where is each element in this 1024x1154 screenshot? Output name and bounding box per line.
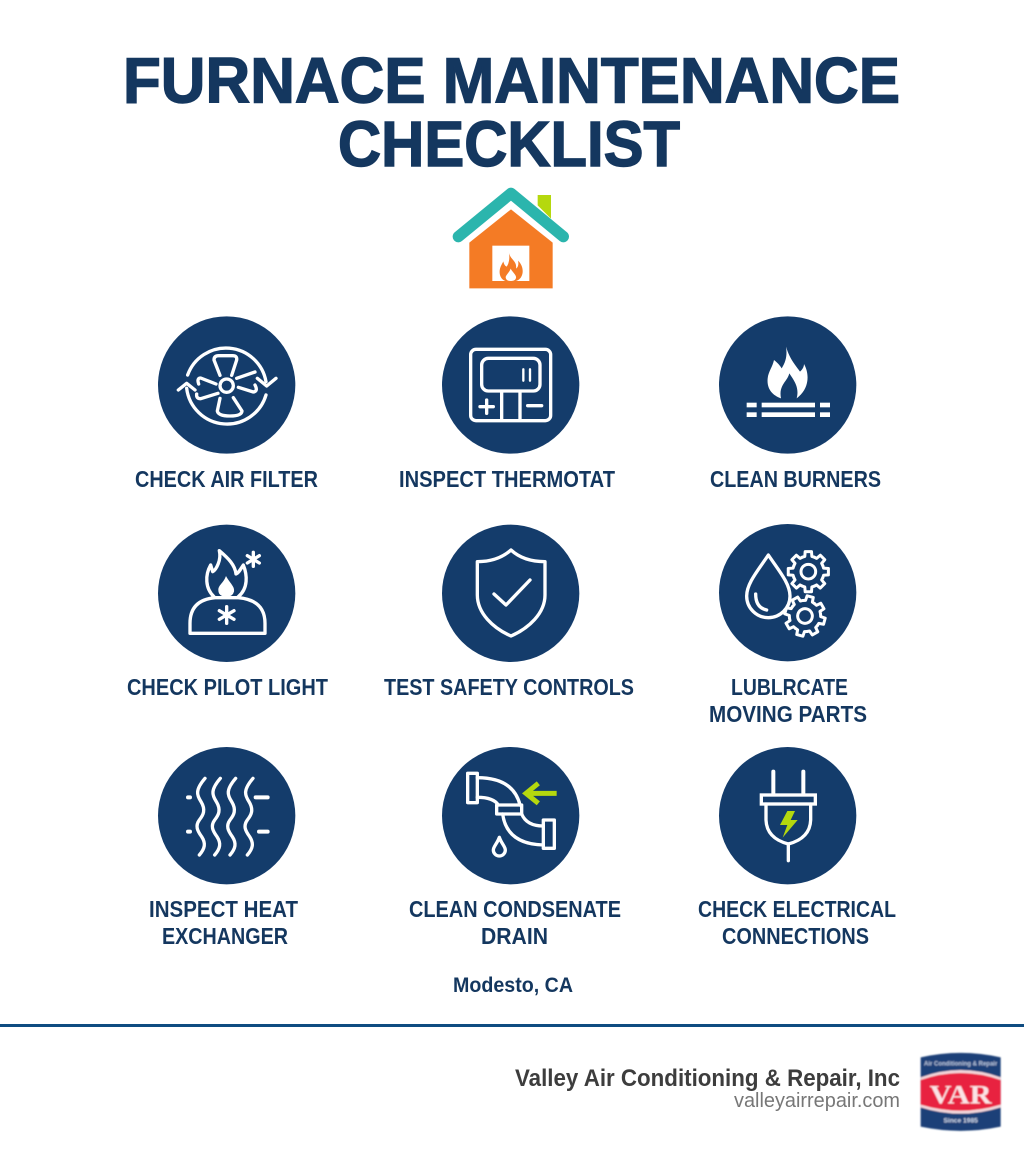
icon: oil drop and gears — [719, 524, 856, 661]
logo: VAR badge: Air Conditioning & Repair — [924, 1060, 998, 1067]
label: DRAIN — [481, 923, 548, 949]
panel: test safety controls — [384, 525, 634, 700]
label: EXCHANGER — [162, 923, 288, 949]
panel: clean burners — [710, 316, 881, 492]
icon: electrical plug — [719, 747, 856, 884]
panel: check air filter — [135, 316, 318, 492]
panel: check electrical connections — [698, 747, 896, 949]
panel: check pilot light — [127, 525, 328, 700]
label — [149, 896, 298, 949]
icon: pilot flame — [158, 525, 295, 662]
panel: lubricate moving parts — [709, 524, 867, 727]
logo: VAR badge: VAR — [930, 1080, 992, 1109]
icon: shield with check — [442, 525, 579, 662]
footer: website: valleyairrepair.com — [734, 1090, 900, 1112]
label: CHECK AIR FILTER — [135, 466, 318, 492]
logo: VAR badge — [921, 1053, 1001, 1131]
footer divider — [0, 1024, 1024, 1027]
label: CLEAN BURNERS — [710, 466, 881, 492]
icon: thermostat — [442, 316, 579, 454]
label: CONNECTIONS — [722, 923, 869, 949]
label: TEST SAFETY CONTROLS — [384, 674, 634, 700]
panel: inspect thermostat — [399, 316, 615, 492]
footer: company name: Valley Air Conditioning & Repair, Inc — [515, 1065, 900, 1092]
title: CHECKLIST — [338, 108, 680, 180]
logo: VAR badge: Since 1985 — [943, 1118, 978, 1125]
title — [123, 44, 900, 180]
label: CHECK ELECTRICAL — [698, 896, 896, 922]
panel: inspect heat exchanger — [149, 747, 298, 949]
label — [709, 674, 867, 727]
icon: flame over burner — [719, 316, 856, 454]
icon: drain pipe with arrow — [442, 747, 579, 884]
label: CHECK PILOT LIGHT — [127, 674, 328, 700]
label — [698, 896, 896, 949]
icon: fan with rotating arrows — [158, 316, 295, 454]
label: MOVING PARTS — [709, 701, 867, 727]
label: CLEAN CONDSENATE — [409, 896, 621, 922]
icon: house with flame — [458, 193, 563, 288]
label: INSPECT THERMOTAT — [399, 466, 615, 492]
icon: heat waves — [158, 747, 295, 884]
panel: clean condensate drain — [409, 747, 621, 949]
label — [409, 896, 621, 949]
label: INSPECT HEAT — [149, 896, 298, 922]
label: LUBLRCATE — [731, 674, 848, 700]
title: FURNACE MAINTENANCE — [123, 44, 900, 116]
location text: Modesto, CA — [453, 974, 573, 997]
